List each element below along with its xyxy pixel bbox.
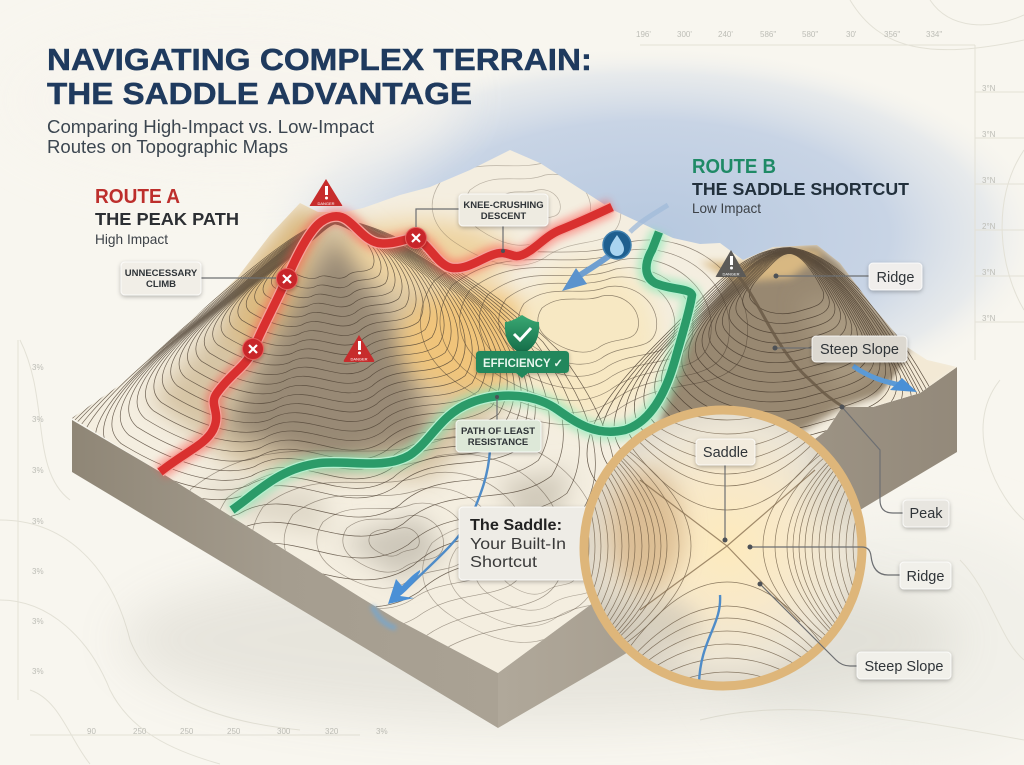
badge: efficiency — [476, 351, 569, 378]
route A label: ROUTE A — [95, 186, 180, 208]
callout: the saddle: The Saddle: — [470, 517, 562, 534]
label: steep slope — [857, 652, 951, 679]
label: saddle — [696, 439, 755, 465]
label: ridge — [900, 562, 951, 589]
grid coordinates: 356" — [884, 30, 900, 39]
icon: danger marker slope — [344, 335, 374, 362]
icon: danger marker top — [310, 179, 342, 206]
icon: danger marker slope: DANGER — [350, 356, 368, 362]
contours: lower field — [190, 436, 588, 647]
leader: unnecessary climb — [201, 277, 277, 279]
callout: the saddle — [459, 507, 589, 580]
route A label: THE PEAK PATH — [95, 209, 239, 229]
label: peak: Peak — [909, 506, 943, 522]
label: saddle: Saddle — [703, 445, 748, 461]
callout: unnecessary climb — [121, 262, 201, 295]
grid coordinates: 3% — [32, 415, 44, 424]
icon: x marker upper — [276, 268, 298, 290]
grid coordinates: 3°N — [982, 130, 996, 139]
route A label — [95, 186, 239, 247]
callout: knee-crushing descent: DESCENT — [481, 211, 526, 222]
callout: the saddle: Shortcut — [470, 554, 538, 571]
callout: path of least resistance: RESISTANCE — [468, 437, 528, 448]
grid coordinates: 3°N — [982, 176, 996, 185]
label: ridge top: Ridge — [877, 270, 914, 286]
arrow: right water flow — [853, 366, 917, 392]
stream: lower river — [405, 450, 490, 590]
route B label: THE SADDLE SHORTCUT — [692, 179, 909, 199]
terrain surface — [72, 150, 957, 673]
icon: danger marker grey — [716, 250, 746, 277]
grid coordinates: 3% — [32, 363, 44, 372]
label: ridge: Ridge — [907, 569, 944, 585]
grid coordinates: 3°N — [982, 268, 996, 277]
left wall — [72, 420, 498, 728]
grid coordinates: 300 — [277, 727, 291, 736]
callout: path of least resistance — [456, 420, 541, 452]
grid coordinates: 240' — [718, 30, 733, 39]
icon: danger marker top: DANGER — [317, 201, 335, 206]
contours: central slope — [420, 240, 748, 425]
grid coordinates: 3% — [32, 567, 44, 576]
terrain block — [72, 150, 957, 728]
grid coordinates: 250 — [227, 727, 241, 736]
grid coordinates: 2°N — [982, 222, 996, 231]
grid coordinates: 300' — [677, 30, 692, 39]
lens contours — [588, 416, 856, 678]
leader: lens ridge — [750, 547, 900, 575]
route A label: High Impact — [95, 231, 168, 247]
grid coordinates: 580" — [802, 30, 818, 39]
label: steep slope top — [812, 336, 907, 362]
title — [47, 42, 592, 111]
right wall — [498, 367, 957, 728]
subtitle: Routes on Topographic Maps — [47, 136, 288, 157]
leader: lens saddle — [724, 465, 726, 540]
grid coordinates: 334" — [926, 30, 942, 39]
grid coordinates: 586" — [760, 30, 776, 39]
leader: knee-crushing descent — [416, 209, 503, 251]
icon: efficiency shield — [505, 315, 539, 354]
callout: unnecessary climb: CLIMB — [146, 279, 176, 290]
ridge crease — [735, 272, 845, 408]
lens ridge lines — [640, 470, 815, 622]
route B label: ROUTE B — [692, 156, 776, 178]
icon: x marker descent — [406, 228, 426, 248]
leader: path of least resistance — [496, 397, 498, 420]
grid coordinates: 90 — [87, 727, 96, 736]
icon: water drop — [603, 231, 631, 259]
callout: the saddle: Your Built-In — [470, 536, 566, 553]
callout: path of least resistance: PATH OF LEAST — [461, 426, 535, 437]
contours: upper valley — [432, 159, 621, 265]
anchor dots — [495, 249, 844, 586]
route B: the saddle shortcut — [232, 232, 692, 510]
title: NAVIGATING COMPLEX TERRAIN: — [47, 42, 592, 77]
icon: x marker lower — [242, 338, 264, 360]
leader: lens steep slope — [760, 584, 857, 666]
arrow: lower water flow — [372, 570, 420, 628]
subtitle: Comparing High-Impact vs. Low-Impact — [47, 116, 374, 137]
grid coordinates: 30' — [846, 30, 857, 39]
label: steep slope top: Steep Slope — [820, 342, 899, 358]
grid coordinates: 250 — [133, 727, 147, 736]
contours: left mountain — [72, 222, 613, 607]
label: peak — [903, 500, 949, 527]
grid coordinates: 320 — [325, 727, 339, 736]
grid coordinates: 3% — [32, 617, 44, 626]
callout: unnecessary climb: UNNECESSARY — [125, 268, 198, 279]
subtitle — [47, 116, 374, 157]
grid coordinates: 196' — [636, 30, 651, 39]
callout: knee-crushing descent: KNEE-CRUSHING — [463, 200, 544, 211]
label: ridge top — [869, 263, 922, 290]
grid coordinates: 3% — [376, 727, 388, 736]
lens: saddle detail — [580, 402, 871, 690]
route A: the peak path — [160, 207, 612, 472]
leader: ridge on mountain — [776, 275, 869, 277]
contours: right mountain — [586, 247, 930, 482]
grid coordinates: 3°N — [982, 84, 996, 93]
route B label — [692, 156, 909, 216]
grid coordinates: 3°N — [982, 314, 996, 323]
block shadow — [120, 555, 960, 725]
grid coordinates: 3% — [32, 667, 44, 676]
lens stream — [699, 595, 720, 684]
route B label: Low Impact — [692, 200, 761, 216]
badge: efficiency: EFFICIENCY ✓ — [483, 358, 563, 370]
leader: peak — [842, 407, 903, 513]
icon: danger marker grey: DANGER — [722, 272, 740, 276]
callout: knee-crushing descent — [459, 194, 548, 226]
grid coordinates: 3% — [32, 466, 44, 475]
leader: steep slope on mountain — [775, 347, 812, 349]
grid coordinates: 250 — [180, 727, 194, 736]
arrow: upper water flow — [562, 205, 668, 291]
title: THE SADDLE ADVANTAGE — [47, 76, 472, 111]
grid coordinates: 3% — [32, 517, 44, 526]
label: steep slope: Steep Slope — [864, 659, 944, 675]
